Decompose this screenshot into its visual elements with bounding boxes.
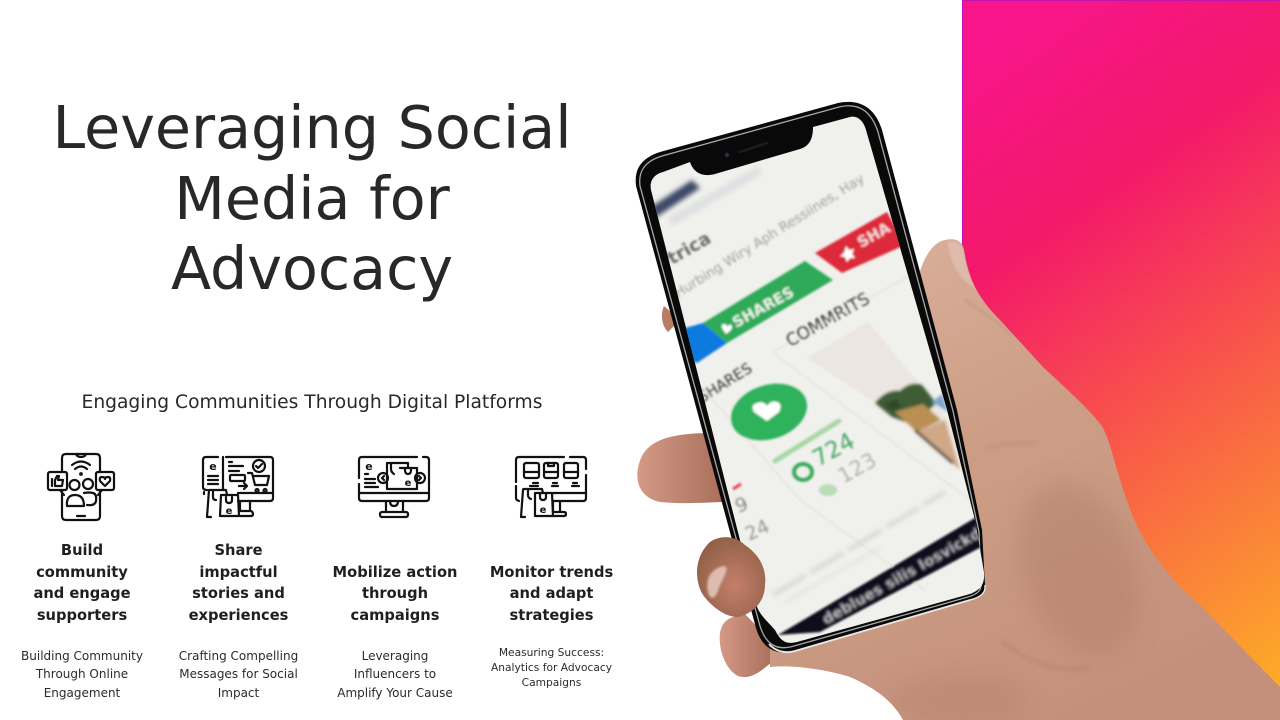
caption: building community: Building Community bbox=[21, 649, 143, 663]
caption: leveraging influencers: Influencers to bbox=[354, 667, 436, 681]
icon: monitor with analytics dashboards bbox=[516, 457, 586, 517]
caption: crafting messages: Messages for Social bbox=[179, 667, 298, 681]
phone screen bbox=[650, 116, 984, 643]
caption: measuring success: Analytics for Advocacy bbox=[491, 661, 612, 674]
phone screen: SHA bbox=[854, 219, 894, 251]
label: commits: COMMRITS bbox=[783, 289, 873, 351]
heading: share stories: stories and bbox=[192, 585, 285, 602]
phone body bbox=[636, 102, 986, 654]
icon: monitor with campaign bags: e bbox=[365, 460, 373, 473]
side stats bbox=[733, 484, 741, 489]
button: green shares bbox=[703, 261, 833, 343]
icon: monitor with campaign bags bbox=[359, 457, 429, 517]
hand: front finger over phone bbox=[697, 537, 765, 617]
caption: crafting messages: Crafting Compelling bbox=[179, 649, 298, 663]
heart badge bbox=[730, 382, 809, 442]
phone screen: 24 bbox=[742, 515, 773, 546]
caption: measuring success bbox=[491, 646, 612, 689]
icon: phone with community and reactions bbox=[48, 454, 114, 520]
heading: mobilize action: through bbox=[362, 585, 428, 602]
icon: monitor with story and shopping: e bbox=[209, 460, 217, 473]
phone screen: SHARES bbox=[729, 283, 797, 331]
caption: leveraging influencers bbox=[337, 649, 453, 700]
icon: monitor with story and shopping bbox=[203, 457, 273, 517]
phone screen: 123 bbox=[834, 448, 880, 488]
icon: monitor with analytics dashboards: e bbox=[540, 505, 547, 516]
caption: measuring success: Measuring Success: bbox=[499, 646, 604, 659]
phone camera and speaker bbox=[725, 143, 767, 157]
card lines bbox=[700, 270, 970, 590]
hand: small finger behind phone bbox=[662, 306, 680, 332]
heading: monitor trends: and adapt bbox=[510, 585, 593, 602]
caption: crafting messages: Impact bbox=[218, 686, 259, 700]
caption: building community bbox=[21, 649, 143, 700]
label: shares: SHARES bbox=[695, 359, 755, 406]
title: Media for bbox=[174, 164, 450, 232]
photo: hand holding phone bbox=[636, 102, 1280, 720]
hand: lower finger bbox=[720, 614, 772, 677]
heading: mobilize action: campaigns bbox=[351, 607, 439, 624]
phone screen: Hurbing Wiry Aph Ressiines, Hay bbox=[672, 171, 867, 301]
button: blue bbox=[680, 323, 727, 363]
hand: top-left finger bbox=[637, 433, 722, 503]
heading: share stories: impactful bbox=[199, 564, 278, 581]
heading: share stories bbox=[189, 542, 288, 624]
icon: monitor with campaign bags: e bbox=[405, 478, 412, 489]
heading: share stories: experiences bbox=[189, 607, 288, 624]
heading: build community: Build bbox=[61, 542, 103, 559]
gradient panel bbox=[962, 0, 1280, 720]
progress bar bbox=[775, 421, 839, 461]
phone screen: trica bbox=[664, 228, 715, 269]
heading: build community: and engage bbox=[33, 585, 131, 602]
stat 123 bbox=[819, 484, 837, 496]
caption: measuring success: Campaigns bbox=[522, 676, 581, 689]
caption: leveraging influencers: Leveraging bbox=[362, 649, 428, 663]
caption: building community: Engagement bbox=[44, 686, 120, 700]
caption: crafting messages bbox=[179, 649, 298, 700]
thumb nail bbox=[947, 242, 975, 288]
heading: share stories: Share bbox=[214, 542, 263, 559]
button: red bbox=[815, 212, 905, 273]
subtitle: Engaging Communities Through Digital Platforms bbox=[82, 392, 542, 413]
caption: leveraging influencers: Amplify Your Cause bbox=[337, 686, 453, 700]
title: Advocacy bbox=[171, 235, 453, 303]
heading: monitor trends: strategies bbox=[510, 607, 593, 624]
title bbox=[52, 94, 572, 303]
caption: building community: Through Online bbox=[36, 667, 128, 681]
heading: build community: supporters bbox=[37, 607, 127, 624]
heading: mobilize action bbox=[333, 564, 457, 624]
hand: palm and thumb bbox=[770, 239, 1280, 720]
phone screen: deblues silis Iosvickd Social Me bbox=[819, 482, 1059, 628]
heading: monitor trends bbox=[490, 564, 613, 624]
photo tile bbox=[807, 322, 965, 465]
heading: monitor trends: Monitor trends bbox=[490, 564, 613, 580]
phone screen: 724 bbox=[808, 428, 859, 472]
heading: build community: community bbox=[36, 564, 128, 581]
icon: monitor with story and shopping: e bbox=[226, 506, 233, 517]
blurred header bbox=[651, 180, 700, 218]
heading: build community bbox=[33, 542, 131, 624]
dark band bbox=[778, 512, 985, 635]
stat 724 bbox=[794, 464, 812, 480]
title: Leveraging Social bbox=[52, 94, 572, 162]
heading: mobilize action: Mobilize action bbox=[333, 564, 457, 580]
blurred caption bbox=[773, 492, 945, 595]
phone screen: 9 bbox=[732, 493, 751, 518]
